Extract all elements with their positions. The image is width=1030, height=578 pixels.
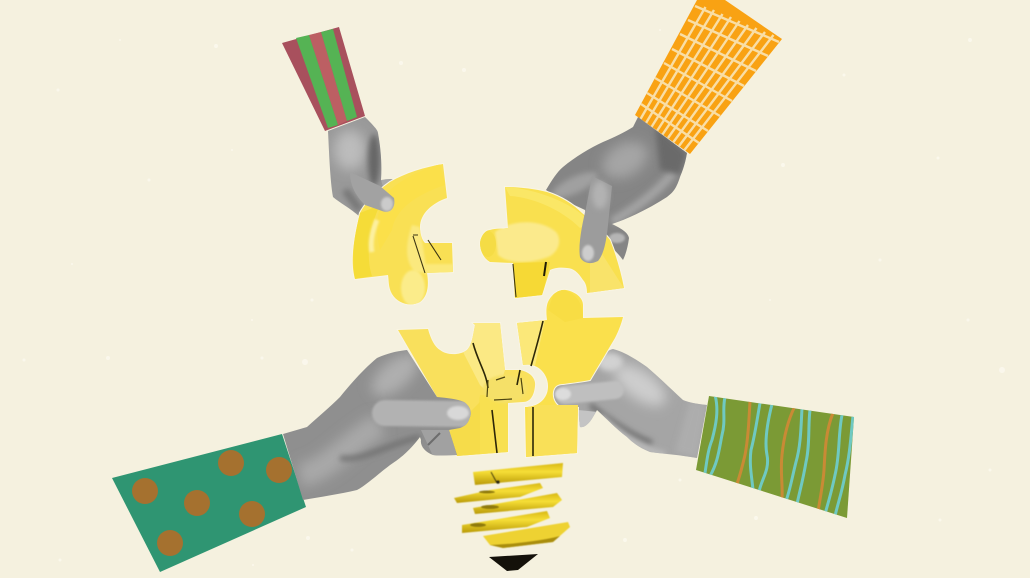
- puzzle piece: top left: [353, 164, 455, 306]
- puzzle piece: top right: [480, 187, 625, 298]
- right-top sleeve: orange grid: [635, 0, 782, 154]
- left-bottom sleeve: green with brown dots: [112, 434, 306, 572]
- puzzle piece: bottom right: [517, 290, 623, 457]
- hand: bottom right: [554, 349, 707, 458]
- hand: top left: [328, 117, 393, 216]
- hand: top right thumb over piece: [579, 176, 612, 263]
- bulb tip: black contact: [489, 554, 538, 571]
- bulb screw base: threads: [454, 463, 570, 548]
- right-bottom sleeve: green with wavy stripes: [696, 395, 854, 518]
- left-top sleeve: red with green stripes: [282, 27, 365, 131]
- hand: bottom left: [283, 350, 471, 500]
- puzzle piece: bottom left: [398, 323, 535, 460]
- hand: top right: [546, 117, 687, 260]
- hand: top left thumb over piece: [350, 172, 394, 212]
